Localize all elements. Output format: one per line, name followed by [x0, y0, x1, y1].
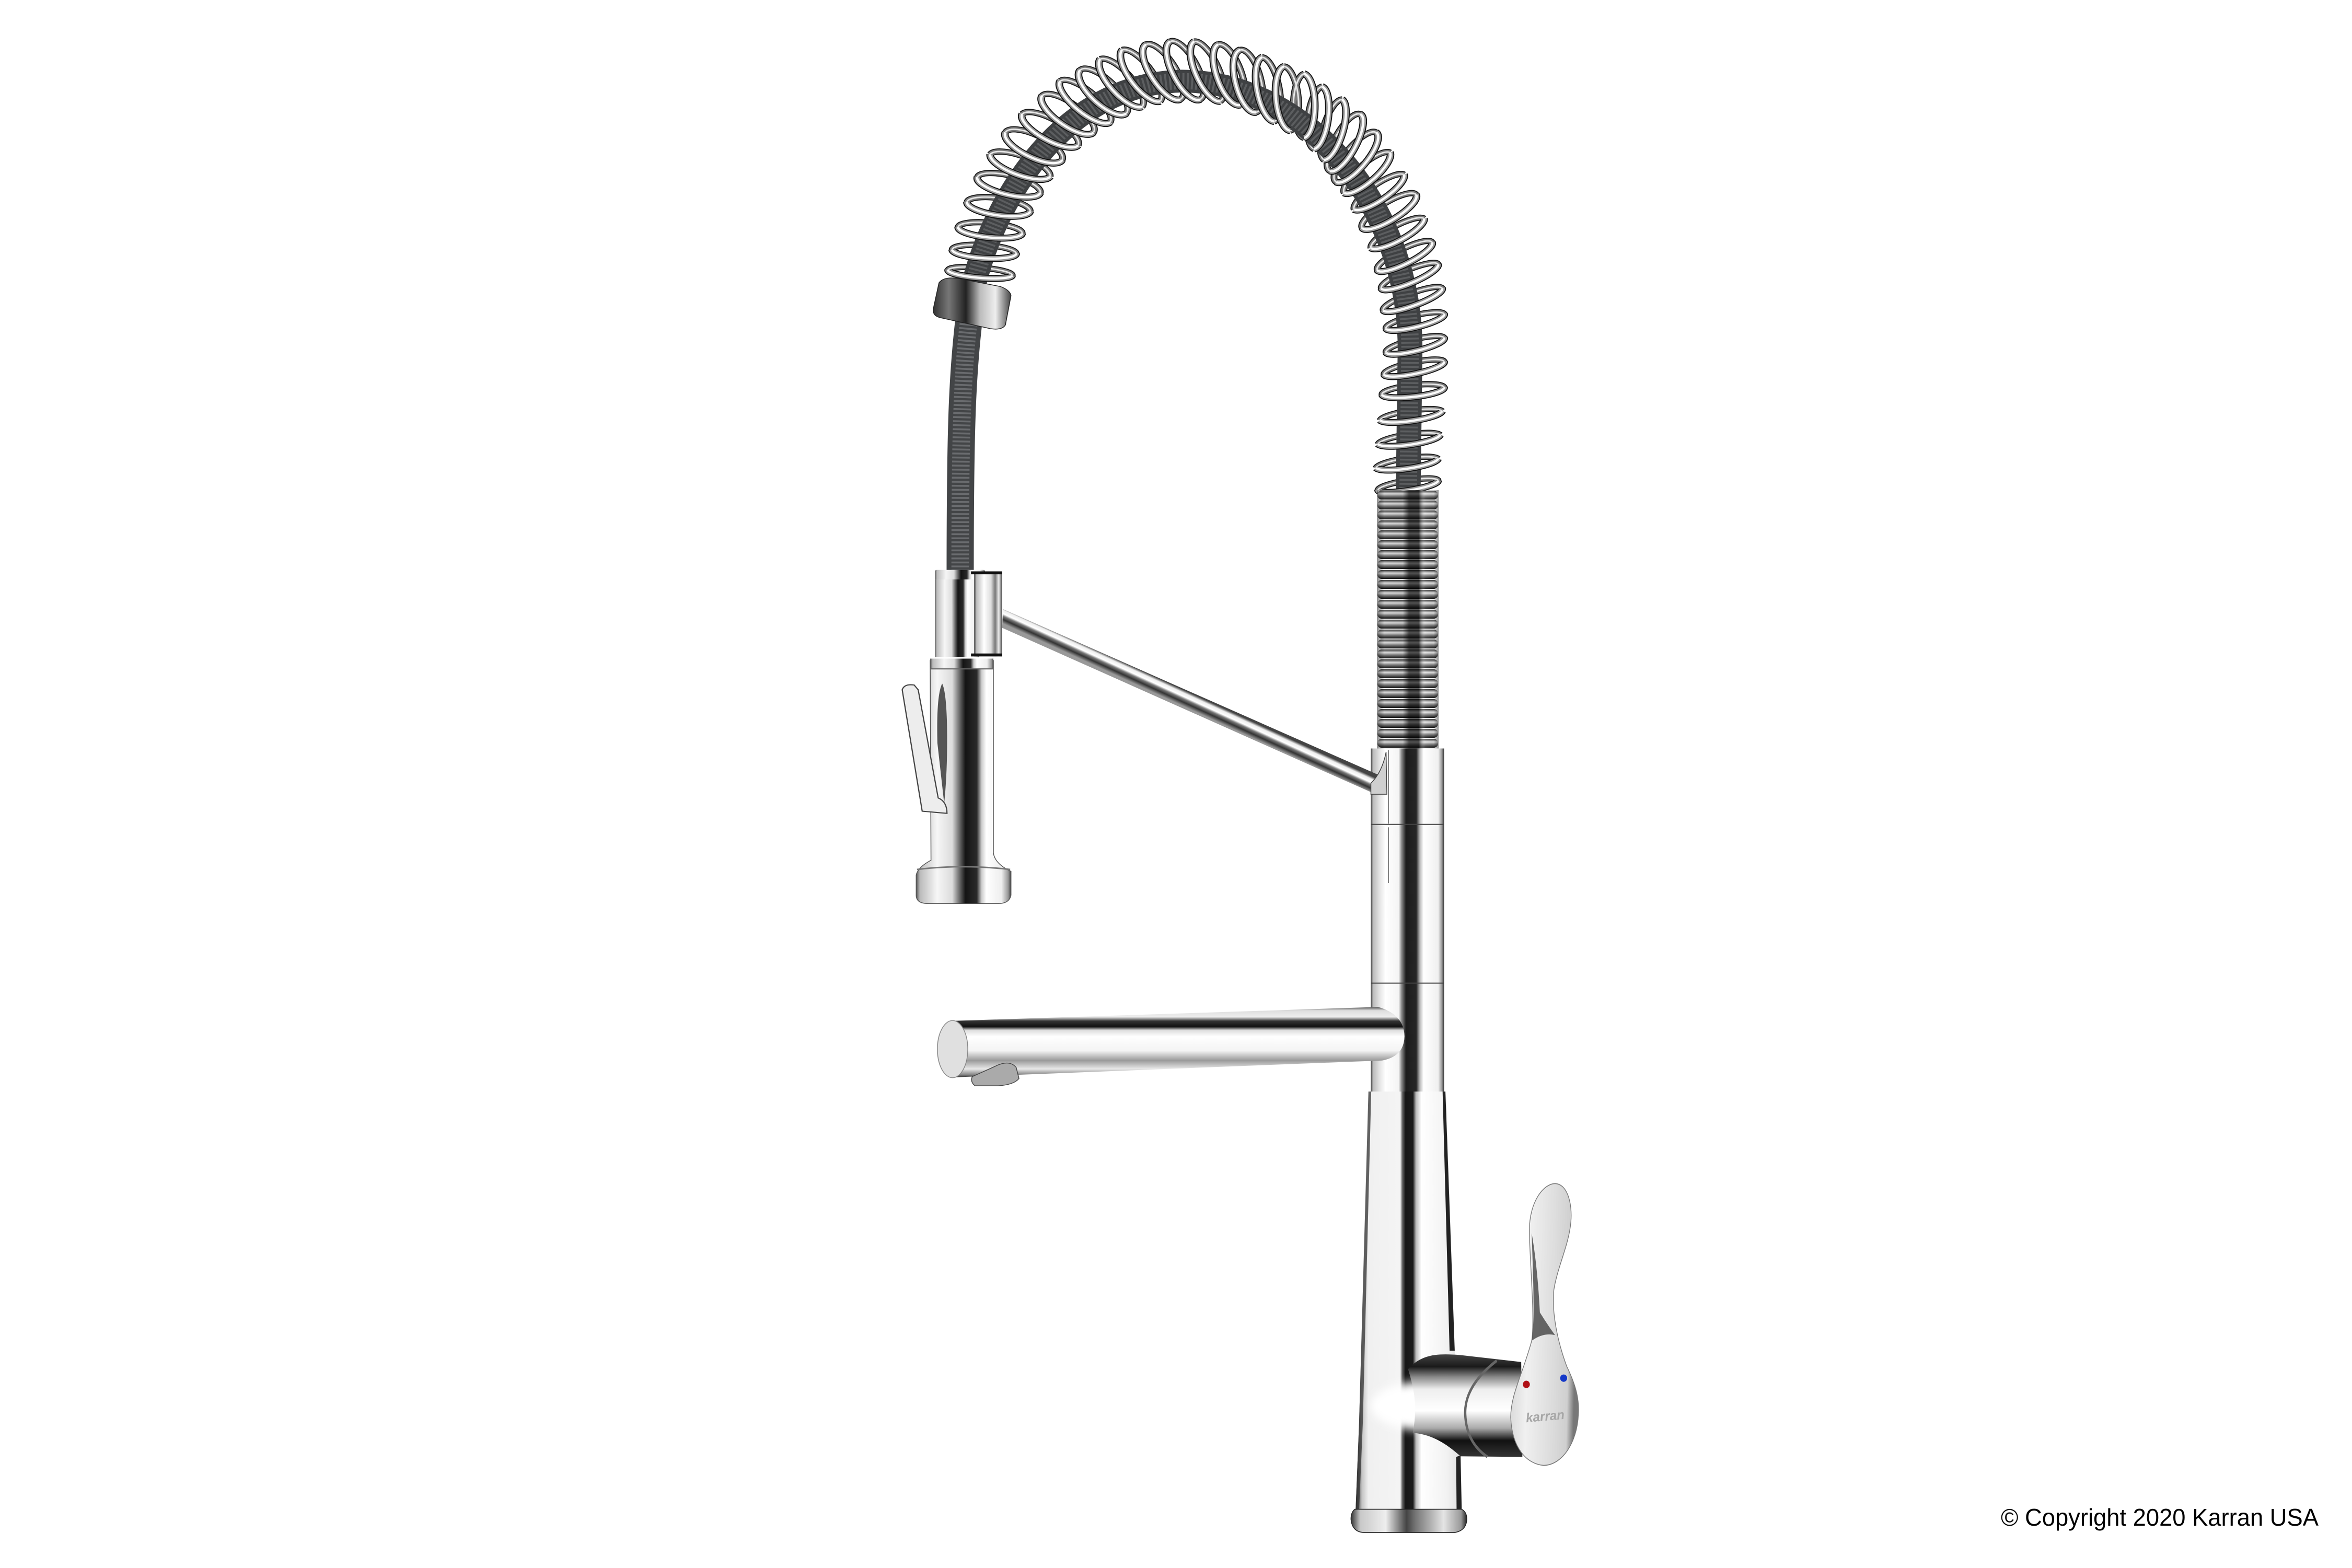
handle hub — [1408, 1354, 1522, 1457]
cold indicator — [1560, 1375, 1567, 1382]
tight coil section — [1377, 490, 1439, 749]
pivot arm — [1002, 609, 1381, 794]
spray head upper body — [935, 570, 1002, 657]
pivot arm, spray head, column and spout — [902, 570, 1444, 1092]
lower braided hose — [960, 316, 969, 576]
column — [1371, 748, 1444, 1092]
spray head lower body — [916, 659, 1011, 903]
main spout — [937, 1007, 1405, 1086]
hose collar — [933, 278, 1011, 329]
arm socket — [1371, 752, 1387, 794]
spray trigger — [902, 685, 947, 814]
spring arch with hose — [933, 41, 1444, 576]
faucet lower body and handle — [1351, 1091, 1579, 1532]
handle reflection — [1532, 1233, 1555, 1341]
base — [1351, 1509, 1467, 1532]
hub ring — [1465, 1361, 1497, 1457]
hot indicator — [1523, 1381, 1530, 1388]
copyright notice: © Copyright 2020 Karran USA — [2001, 1504, 2319, 1531]
faucet illustration — [902, 41, 1579, 1532]
lever handle — [1511, 1183, 1579, 1466]
brand logo text: karran — [1525, 1408, 1565, 1425]
tapered body — [1355, 1091, 1474, 1511]
